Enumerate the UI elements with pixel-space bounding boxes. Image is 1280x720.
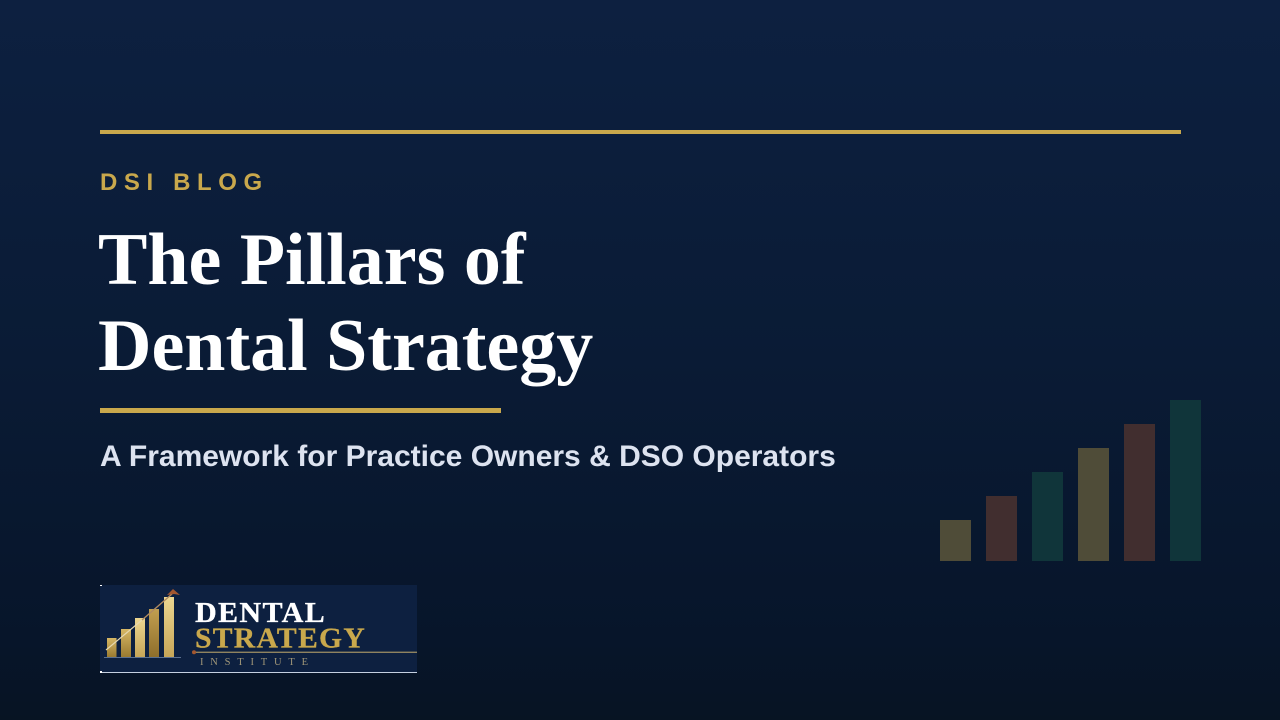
gold divider under title	[100, 408, 501, 413]
decorative bar chart	[940, 400, 1201, 561]
bar 5	[1124, 424, 1155, 561]
top gold rule	[100, 130, 1181, 134]
logo wordmark	[192, 598, 417, 668]
logo wordmark: DENTAL	[195, 598, 326, 629]
logo: Dental Strategy Institute	[100, 585, 417, 673]
bar 4	[1078, 448, 1109, 561]
logo wordmark: STRATEGY	[195, 624, 366, 654]
title: Dental Strategy	[98, 304, 593, 386]
bar 6	[1170, 400, 1201, 561]
title: The Pillars of	[98, 219, 526, 301]
bar 3	[1032, 472, 1063, 561]
eyebrow: DSI Blog: DSI BLOG	[100, 169, 269, 196]
bar 1	[940, 520, 971, 561]
title	[98, 219, 593, 386]
bar 2	[986, 496, 1017, 561]
logo icon: rising bars with arrow	[104, 589, 181, 658]
logo wordmark: INSTITUTE	[200, 657, 308, 668]
subtitle: A Framework for Practice Owners & DSO Operators	[100, 440, 836, 473]
